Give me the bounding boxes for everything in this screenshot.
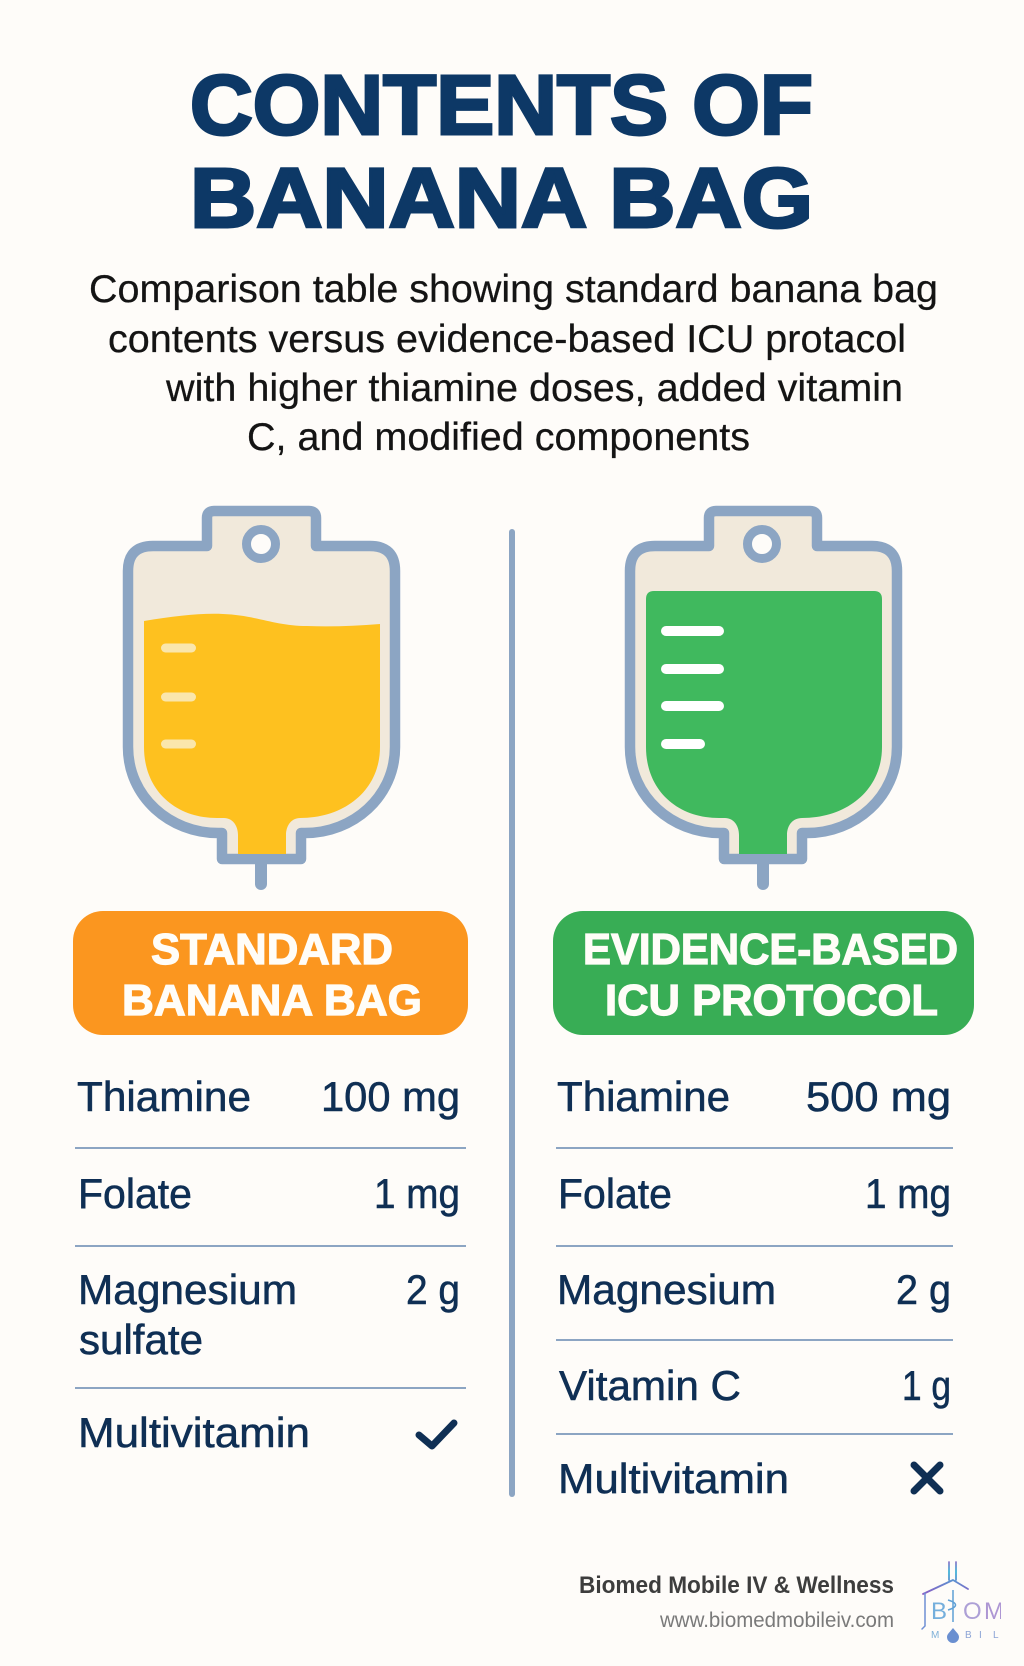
subtitle text block <box>89 268 938 459</box>
row: multivitamin check: Multivitamin <box>78 1409 310 1456</box>
row: vitamin C 1 g <box>559 1362 951 1409</box>
row: magnesium 2 g: 2 g <box>896 1266 951 1313</box>
subtitle text block: with higher thiamine doses, added vitamin <box>165 367 903 410</box>
logo: L <box>993 1630 999 1641</box>
row: magnesium sulfate 2 g <box>78 1266 460 1363</box>
subtitle text block: C, and modified components <box>247 416 750 459</box>
row: magnesium 2 g: Magnesium <box>557 1266 776 1313</box>
icon: green IV bag <box>630 511 897 884</box>
row: magnesium sulfate 2 g: Magnesium <box>78 1266 297 1313</box>
row: folate 1 mg: 1 mg <box>374 1170 460 1217</box>
logo: B <box>965 1630 972 1641</box>
row: thiamine 500 mg <box>557 1073 951 1120</box>
subtitle text block: Comparison table showing standard banana bag <box>89 268 938 311</box>
footer brand text: www.biomedmobileiv.com <box>659 1609 894 1632</box>
logo <box>922 1562 1004 1643</box>
logo: M <box>984 1598 1004 1625</box>
title: CONTENTS OF <box>190 58 813 152</box>
logo: O <box>963 1598 982 1625</box>
icon: yellow IV bag <box>128 511 395 884</box>
row: multivitamin check <box>78 1409 454 1456</box>
row: magnesium 2 g <box>557 1266 951 1313</box>
row: magnesium sulfate 2 g: 2 g <box>406 1266 460 1313</box>
footer brand text: Biomed Mobile IV & Wellness <box>579 1572 894 1599</box>
row: multivitamin cross <box>558 1455 940 1502</box>
subtitle text block: contents versus evidence-based ICU protacol <box>108 318 906 361</box>
heading pill: evidence-based ICU protocol: ICU PROTOCOL <box>605 977 938 1025</box>
title <box>190 58 813 245</box>
row: magnesium sulfate 2 g: sulfate <box>79 1316 203 1363</box>
heading pill: standard banana bag: BANANA BAG <box>122 977 422 1025</box>
row: folate 1 mg <box>558 1170 951 1217</box>
center divider <box>509 532 515 1494</box>
heading pill: evidence-based ICU protocol: EVIDENCE-BASED <box>583 926 958 974</box>
panel: evidence-based ICU protocol <box>553 511 974 1502</box>
footer brand text <box>579 1572 894 1632</box>
heading pill: standard banana bag <box>73 911 468 1035</box>
row: thiamine 500 mg: Thiamine <box>557 1073 730 1120</box>
icon: check mark <box>419 1423 454 1446</box>
logo: I <box>979 1630 982 1641</box>
row: vitamin C 1 g: Vitamin C <box>559 1362 741 1409</box>
row: folate 1 mg: Folate <box>78 1170 192 1217</box>
heading pill: standard banana bag: STANDARD <box>151 926 393 974</box>
row: vitamin C 1 g: 1 g <box>902 1362 951 1409</box>
row: folate 1 mg: 1 mg <box>865 1170 951 1217</box>
row: thiamine 500 mg: 500 mg <box>806 1073 951 1120</box>
row: thiamine 100 mg: Thiamine <box>77 1073 251 1120</box>
logo: B <box>931 1598 947 1625</box>
icon: cross mark <box>914 1465 940 1491</box>
row: multivitamin cross: Multivitamin <box>558 1455 789 1502</box>
row: folate 1 mg: Folate <box>558 1170 672 1217</box>
panel: standard banana bag <box>73 511 468 1456</box>
logo: M <box>931 1630 939 1641</box>
heading pill: evidence-based ICU protocol <box>553 911 974 1035</box>
title: BANANA BAG <box>190 151 813 245</box>
row: thiamine 100 mg <box>77 1073 460 1120</box>
row: folate 1 mg <box>78 1170 460 1217</box>
row: thiamine 100 mg: 100 mg <box>321 1073 460 1120</box>
